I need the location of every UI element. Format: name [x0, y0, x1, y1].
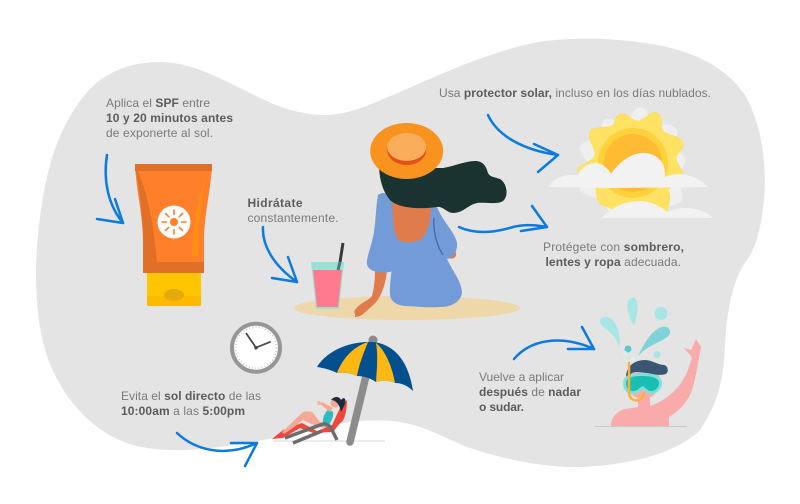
bare back: [392, 200, 431, 242]
hair: [626, 360, 668, 378]
icon: sunscreen tube: [135, 164, 212, 306]
clouds: [549, 153, 708, 188]
ground shadow: [273, 440, 385, 442]
water splash: [600, 298, 670, 361]
shadow line: [595, 426, 687, 427]
lounger frame: [285, 424, 337, 443]
arrow: to sun: [488, 115, 558, 172]
hair: [379, 161, 507, 213]
hat: [370, 123, 443, 179]
arrow: to sunscreen: [97, 155, 123, 223]
text: reapply: Vuelve a aplicar: [479, 370, 564, 384]
text: protect: lentes y ropa adecuada.: [546, 255, 681, 269]
arrow: to swimmer: [514, 327, 594, 359]
text: reapply: después de nadar: [479, 385, 581, 399]
arm: [354, 270, 387, 317]
snorkel: [629, 363, 644, 400]
sun disc: [598, 128, 668, 198]
sun rays: [578, 112, 683, 212]
text: avoid direct sun: [121, 389, 261, 418]
tube body: [135, 164, 212, 273]
text: protect: [543, 240, 684, 269]
arrow: to hat: [459, 206, 547, 232]
halo: [561, 98, 699, 232]
background blob: [36, 39, 765, 467]
umbrella canopy: [317, 342, 413, 391]
text: protect: Protégete con sombrero,: [543, 240, 684, 254]
text: hydrate: Hidrátate: [248, 196, 303, 210]
text: reapply: o sudar.: [479, 400, 524, 414]
goggles: [623, 373, 662, 394]
arrow: to drink: [263, 227, 297, 282]
text: apply SPF: Aplica el SPF entre: [106, 96, 210, 110]
tube cap: [147, 273, 201, 306]
umbrella pole: [350, 376, 366, 442]
drink: [311, 243, 344, 309]
illustration: woman on sand: [294, 123, 520, 320]
text: apply SPF: 10 y 20 minutos antes: [106, 111, 233, 125]
text: hydrate: [248, 196, 338, 225]
text: apply SPF: [106, 96, 233, 140]
sun badge: [158, 206, 190, 238]
body: [611, 339, 701, 426]
sunbather: [282, 397, 345, 434]
text: sunscreen on cloudy days: Usa protector solar, incluso en los días nublados.: [439, 86, 711, 100]
dress: [367, 193, 462, 307]
icon: sun and clouds: [549, 98, 713, 232]
lounger: [272, 400, 347, 439]
sand: [294, 296, 520, 320]
text: reapply: [479, 370, 581, 414]
text: avoid direct sun: 10:00am a las 5:00pm: [121, 404, 245, 418]
arrow: to beach: [177, 433, 257, 466]
illustration: umbrella and lounger: [272, 336, 413, 443]
illustration: swimmer: [595, 298, 701, 427]
head: [626, 363, 660, 399]
text: apply SPF: de exponerte al sol.: [106, 126, 213, 140]
text: avoid direct sun: Evita el sol directo de las: [121, 389, 261, 403]
text: hydrate: constantemente.: [248, 211, 338, 225]
icon: clock: [232, 324, 280, 372]
